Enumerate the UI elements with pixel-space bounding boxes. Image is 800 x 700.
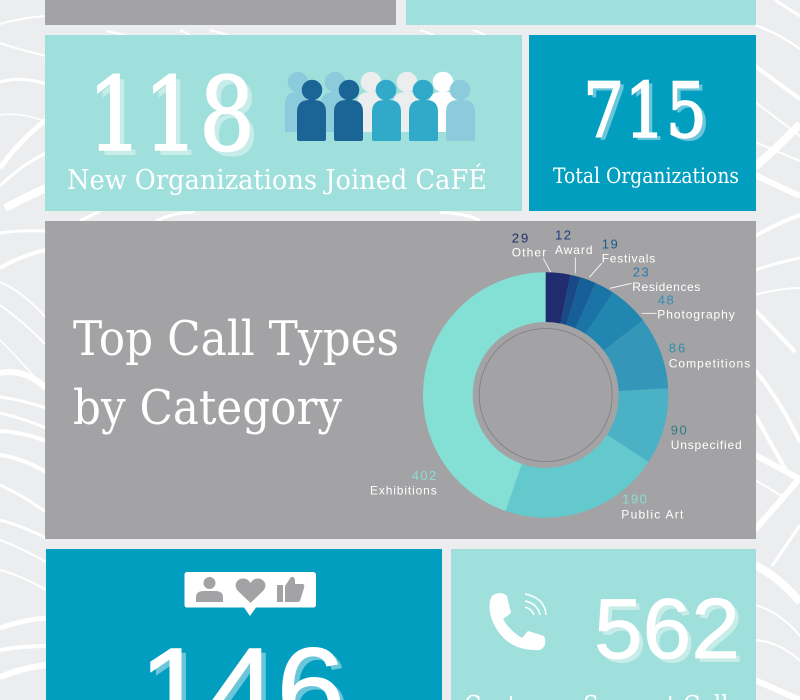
chart labels: Other <box>512 246 546 260</box>
chart labels: 29 <box>512 231 528 246</box>
big number: 562: 562 <box>594 582 740 677</box>
chart labels: 19 <box>602 236 618 251</box>
big number: 118: 118 <box>92 61 260 180</box>
caption: new organizations: New Organizations Joined CaFÉ <box>67 163 487 196</box>
chart labels: 402 <box>412 468 436 483</box>
panel: top left gray <box>45 0 396 25</box>
chart labels: Award <box>555 243 592 257</box>
heading: top call types by category: by Category <box>73 380 342 436</box>
chart labels: Residences <box>632 280 700 294</box>
chart labels: 90 <box>671 422 687 437</box>
chart labels: Exhibitions <box>370 483 437 497</box>
chart labels: 12 <box>555 227 571 242</box>
heading: top call types by category: Top Call Types <box>73 311 399 367</box>
chart labels: 48 <box>658 292 674 307</box>
chart labels: 86 <box>669 341 685 356</box>
panel: top right teal <box>406 0 756 25</box>
big number: 562 <box>597 598 740 663</box>
panel: new organizations <box>45 35 522 211</box>
panel: customer support <box>451 549 756 700</box>
chart labels: Competitions <box>669 356 750 370</box>
chart labels: Unspecified <box>671 438 742 452</box>
chart labels: Photography <box>657 307 735 321</box>
chart labels <box>370 227 750 521</box>
big number: 118: 118 <box>87 56 255 175</box>
chart labels: 190 <box>622 491 647 506</box>
chart labels: 23 <box>633 265 649 280</box>
donut chart <box>423 272 668 518</box>
panel: total organizations <box>529 35 756 211</box>
icon: phone <box>490 593 546 650</box>
big number: 562: 562 <box>598 586 744 681</box>
heading: top call types by category <box>73 311 399 436</box>
chart leader lines <box>543 257 657 313</box>
chart labels: Festivals <box>602 252 655 266</box>
big number: 715: 715 <box>587 69 711 158</box>
icon: social reaction bubble <box>184 572 316 616</box>
big number: 715: 715 <box>583 66 707 155</box>
caption: total organizations: Total Organizations <box>553 164 739 188</box>
panel: social media <box>46 549 442 700</box>
chart labels: Public Art <box>621 507 684 521</box>
icon: group of people <box>285 72 475 141</box>
panel: top call types <box>45 221 756 539</box>
